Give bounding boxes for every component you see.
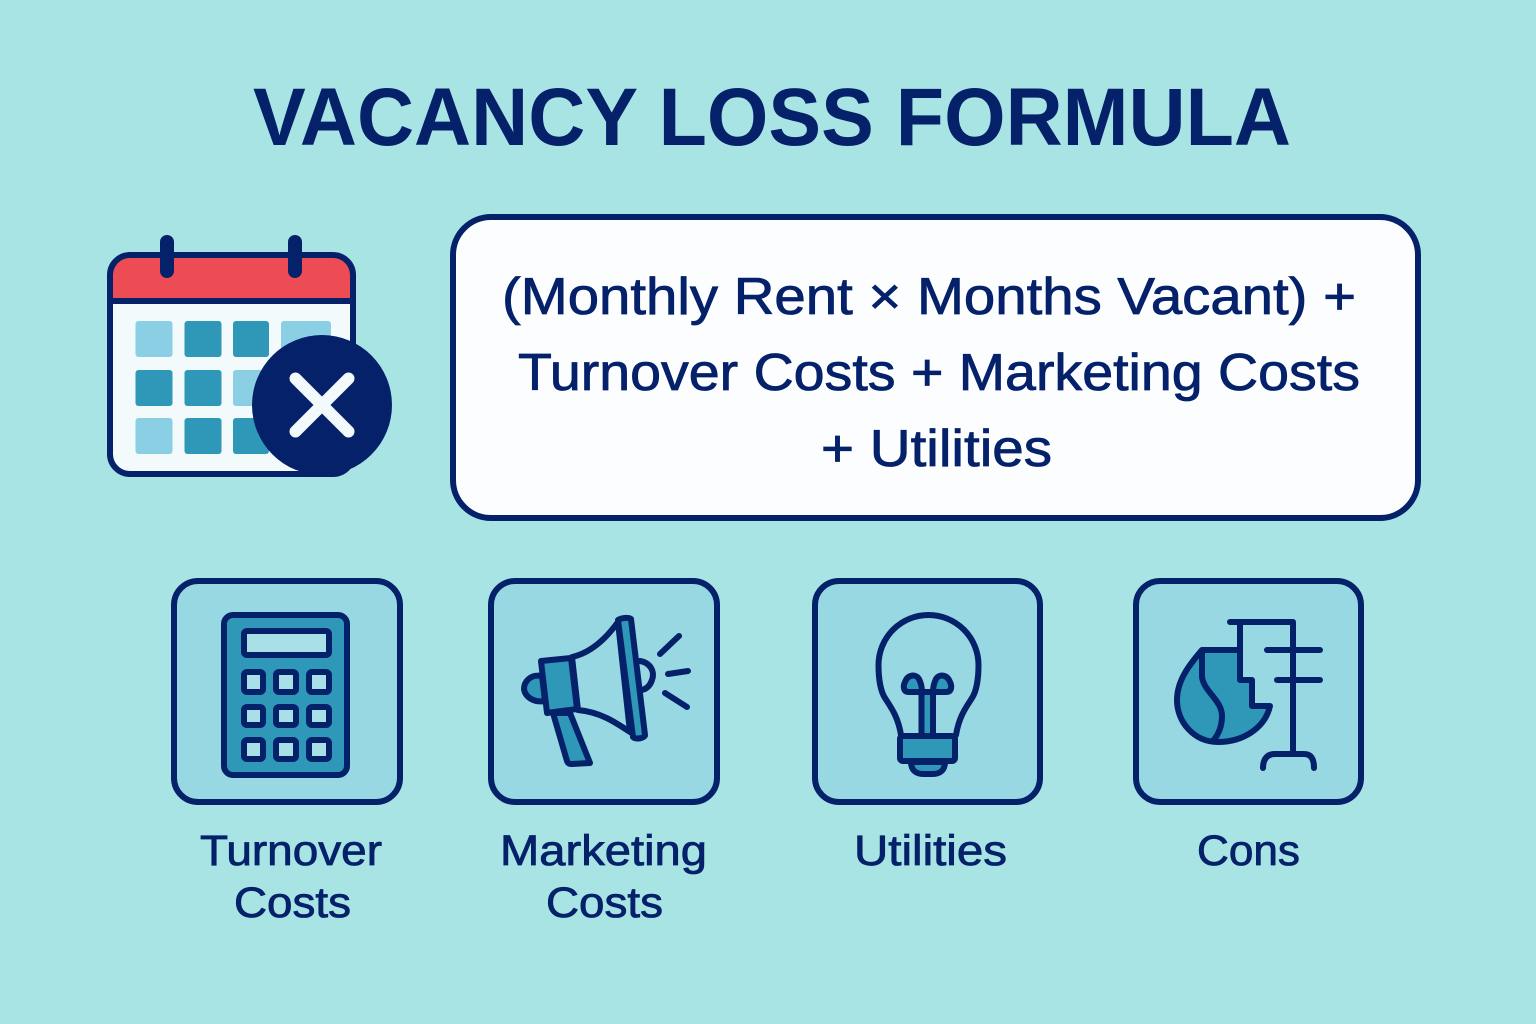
formula text: + Utilities bbox=[821, 420, 1052, 478]
panel: utilities bbox=[815, 581, 1040, 875]
cross badge bbox=[252, 335, 392, 475]
panel: formula bbox=[453, 217, 1418, 518]
formula text: (Monthly Rent × Months Vacant) + bbox=[502, 268, 1356, 326]
calendar date cells bbox=[136, 321, 331, 454]
panel: marketing costs bbox=[491, 581, 717, 927]
label: marketing costs: Marketing bbox=[500, 827, 707, 875]
label: utilities: Utilities bbox=[854, 827, 1007, 875]
calendar body bbox=[110, 255, 353, 474]
label: marketing costs bbox=[500, 827, 707, 927]
icon: abstract drop and rack bbox=[1177, 622, 1320, 768]
formula text: Turnover Costs + Marketing Costs bbox=[518, 344, 1360, 402]
calendar outline bbox=[110, 255, 353, 474]
label: turnover costs: Turnover bbox=[200, 827, 382, 875]
icon: calculator bbox=[224, 615, 347, 775]
panel: cons bbox=[1136, 581, 1361, 875]
calendar rings bbox=[167, 242, 295, 271]
title: VACANCY LOSS FORMULA bbox=[253, 72, 1291, 163]
formula text bbox=[502, 268, 1360, 478]
icon: megaphone bbox=[524, 618, 688, 764]
calendar red header bbox=[110, 255, 353, 301]
label: marketing costs: Costs bbox=[546, 879, 663, 927]
panel: turnover costs bbox=[174, 581, 400, 927]
label: turnover costs: Costs bbox=[234, 879, 351, 927]
label: turnover costs bbox=[200, 827, 382, 927]
icon: light bulb bbox=[878, 615, 978, 774]
icon: calendar with cross bbox=[110, 242, 392, 475]
label: cons: Cons bbox=[1197, 827, 1300, 875]
